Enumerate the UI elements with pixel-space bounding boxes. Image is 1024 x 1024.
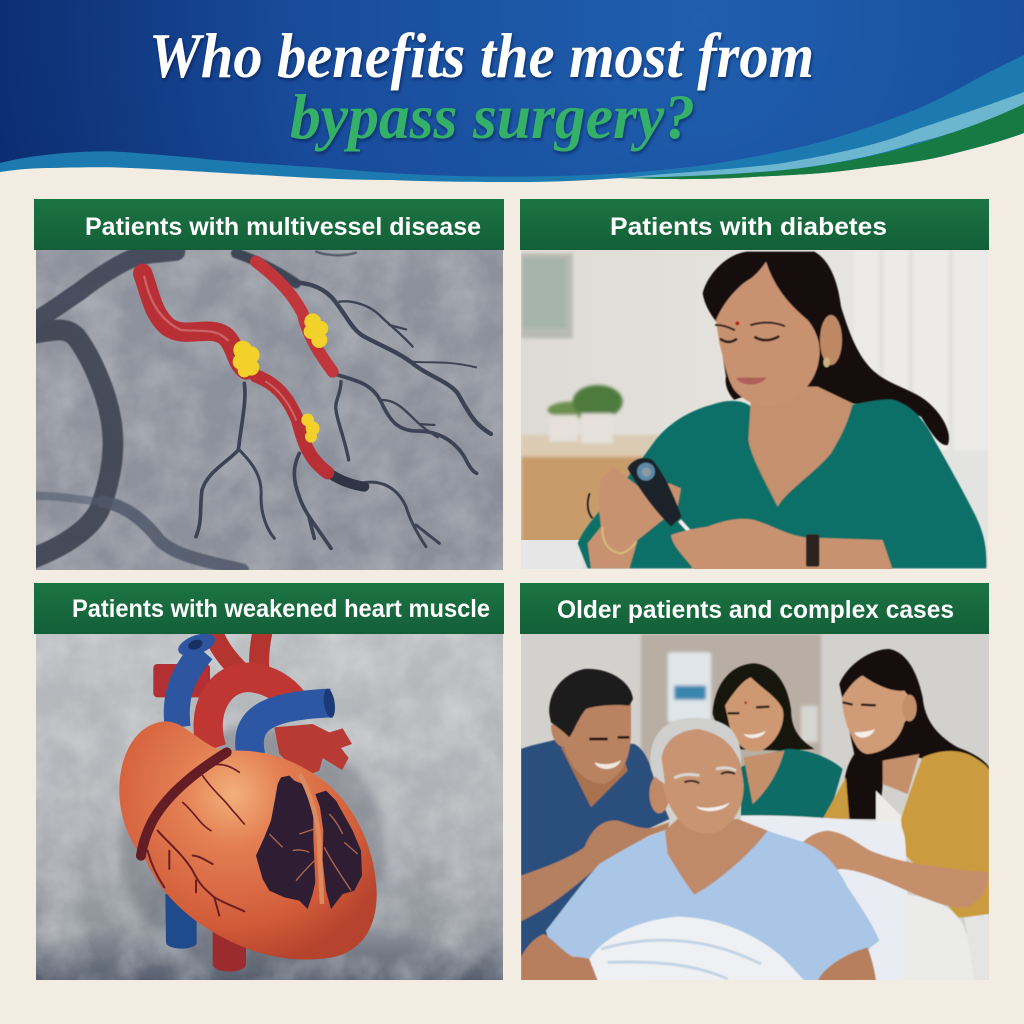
face (716, 262, 820, 406)
image: damaged heart (36, 629, 503, 980)
title: Who benefits the most from (149, 20, 814, 91)
vessels (153, 629, 352, 971)
heading: multivessel disease (34, 199, 504, 250)
wave: blue field (0, 0, 1024, 177)
plaque deposits (233, 313, 328, 443)
photo: elderly patient with family (521, 634, 989, 981)
pillow and bedding (741, 815, 989, 981)
photo: woman checking blood glucose (521, 250, 989, 570)
wave: green (621, 100, 1024, 179)
teal kurta (578, 400, 986, 568)
wave: light teal (621, 92, 1024, 178)
heading: older patients (520, 583, 989, 634)
man in blue shirt (521, 669, 669, 959)
necrotic patch (256, 776, 362, 909)
heart shadow (119, 727, 386, 967)
title (149, 20, 814, 152)
title: bypass surgery? (290, 81, 695, 152)
heading: weakened heart muscle: Patients with weakened heart muscle (72, 595, 490, 623)
neck (748, 387, 853, 507)
heading: diabetes: Patients with diabetes (610, 213, 887, 241)
heading: weakened heart muscle (34, 583, 504, 634)
blocked artery: main (143, 262, 364, 487)
wristwatch (806, 534, 819, 567)
right hand and forearm (671, 519, 893, 570)
panel: weakened heart muscle (34, 583, 504, 980)
elderly patient (521, 718, 879, 981)
panel: older patients (520, 583, 989, 981)
heading: diabetes (520, 199, 989, 250)
panel: multivessel disease (33, 199, 504, 570)
glucose meter (628, 458, 692, 534)
woman's arm on shoulder (794, 831, 989, 908)
heading: older patients: Older patients and complex cases (557, 596, 954, 624)
header banner (0, 0, 1024, 182)
heading: multivessel disease: Patients with multivessel disease (85, 213, 481, 241)
woman in teal (713, 663, 843, 821)
panel: diabetes (520, 199, 989, 570)
hair (703, 252, 949, 445)
heart body (119, 721, 377, 959)
image: blocked arteries (33, 250, 503, 570)
coronary vessels (141, 752, 244, 916)
left forearm and hand (588, 467, 681, 568)
bracelet and band (588, 493, 593, 518)
woman in mustard top (823, 649, 989, 917)
